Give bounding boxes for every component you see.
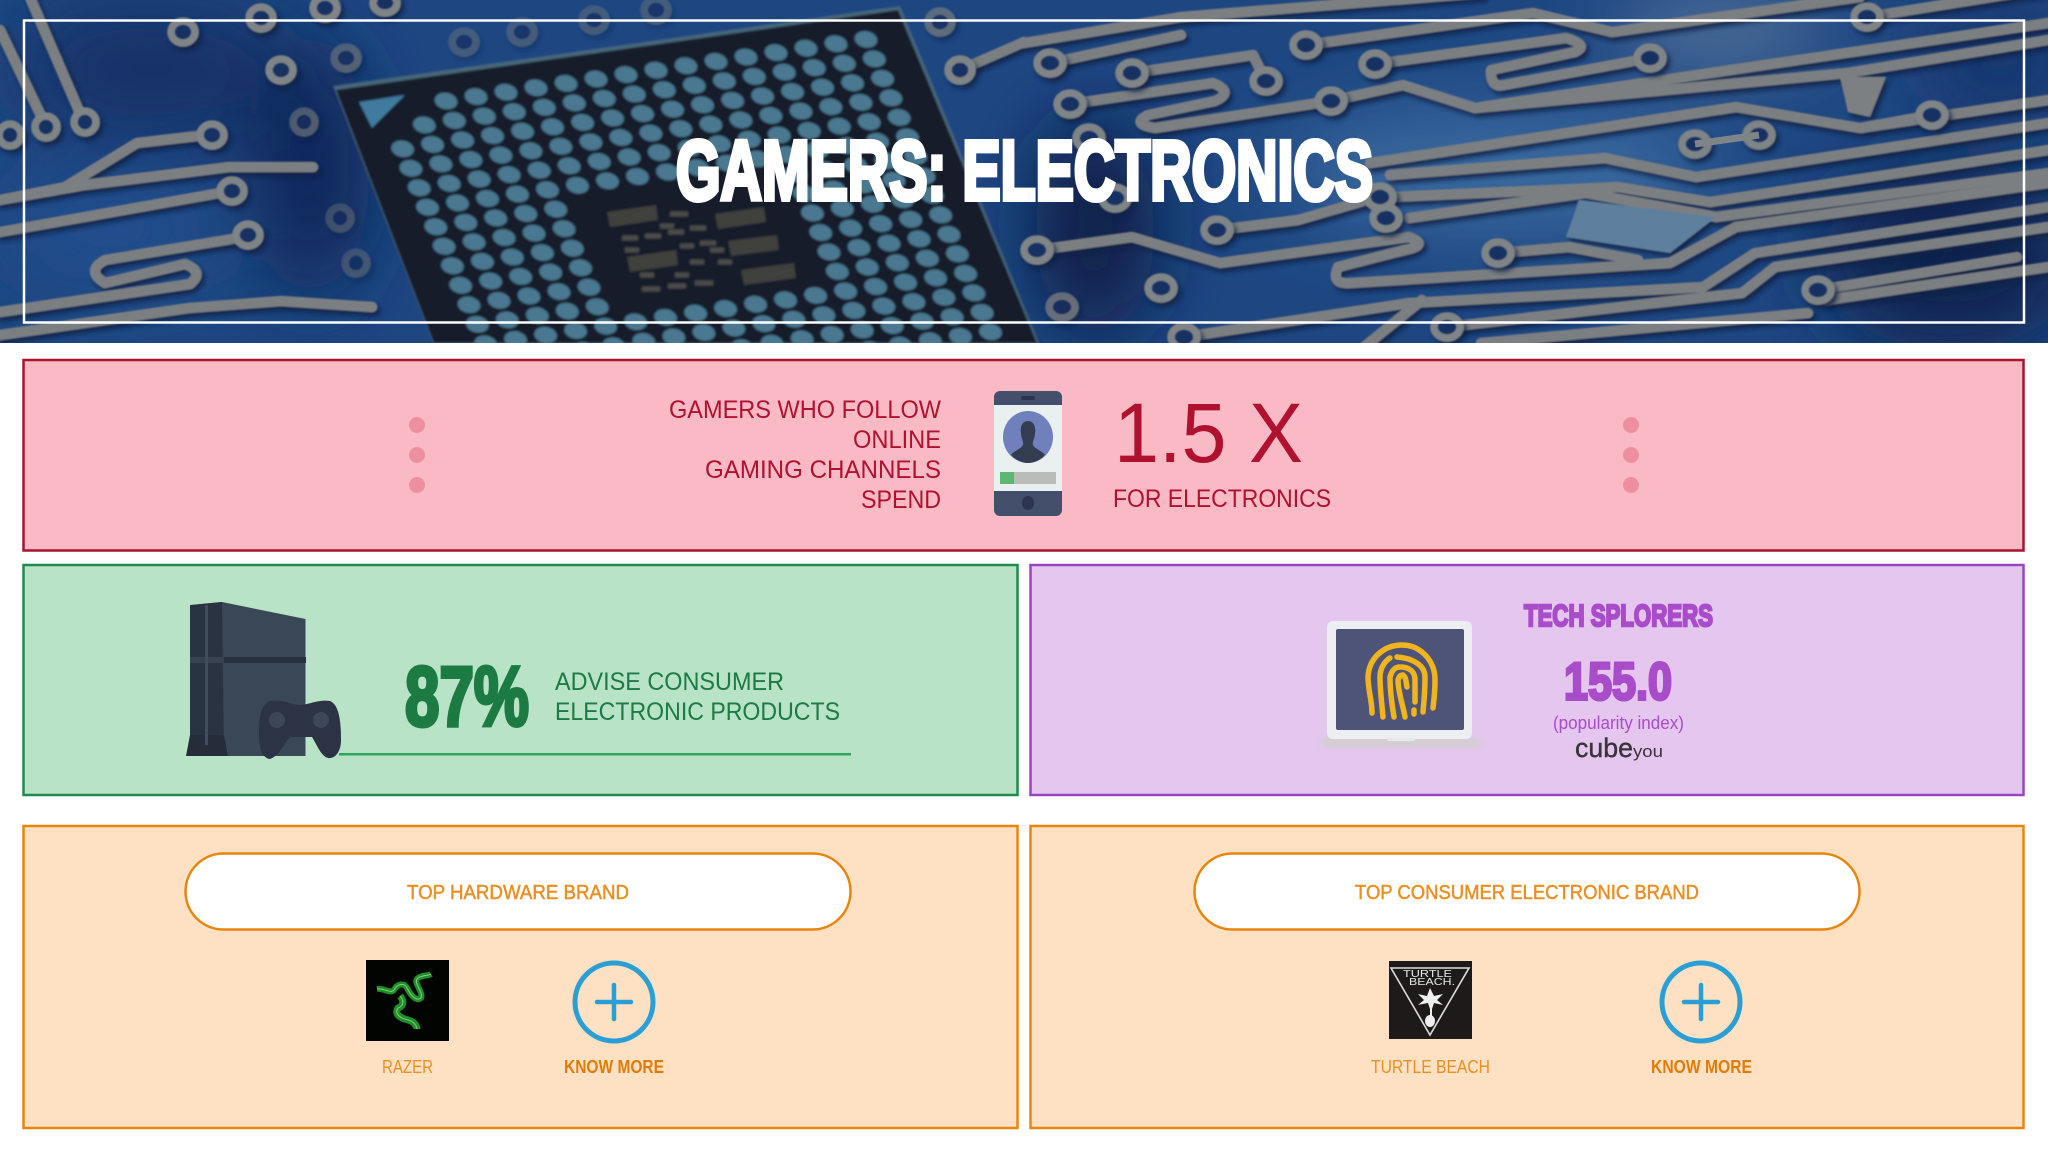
chip contact balls [390,29,1004,343]
logo: turtle beach: TURTLE [1403,969,1452,980]
icon: smartphone [994,391,1062,516]
description text: GAMING CHANNELS [705,456,941,484]
processor chip [332,6,1040,343]
icon: plus button [1662,963,1740,1041]
right dots [1623,417,1639,493]
multiplier: 1.5 X [1114,386,1303,480]
panel: online gaming channels spend [24,360,2024,550]
panel: tech splorers [1030,565,2024,795]
know more link: KNOW MORE [1651,1057,1752,1077]
panel: top consumer electronic brand [1030,826,2024,1128]
hero frame [24,20,2024,322]
chip die components [607,205,796,289]
logo: cubeyou: you [1633,742,1663,761]
logo: turtle beach: BEACH. [1409,977,1455,988]
pill heading [1194,854,1860,930]
icon: laptop with fingerprint [1322,621,1480,748]
pill heading: TOP CONSUMER ELECTRONIC BRAND [1355,882,1699,904]
icon: plus button [575,963,653,1041]
logo: turtle beach [1389,961,1472,1039]
hero banner: circuit board photo [0,0,2048,434]
multiplier caption: FOR ELECTRONICS [1113,485,1331,513]
know more link: KNOW MORE [564,1057,664,1077]
brand name: RAZER [382,1057,433,1077]
stat description: ELECTRONIC PRODUCTS [555,698,840,726]
popularity caption: (popularity index) [1553,713,1684,733]
description text [669,396,941,514]
title: GAMERS: ELECTRONICS [676,124,1373,218]
stat description: ADVISE CONSUMER [555,668,784,696]
segment name: TECH SPLORERS [1524,598,1713,633]
logo: cubeyou: cube [1575,733,1633,763]
popularity value: 155.0 [1564,652,1672,712]
brand name: TURTLE BEACH [1371,1057,1490,1077]
baseline rule [339,753,851,756]
logo: cubeyou [1575,733,1663,763]
icon: game console and controller [186,602,341,759]
left dots [409,417,425,493]
panel: advise consumer electronic products [24,565,1018,795]
stat description [555,668,840,726]
logo: razer [366,960,449,1041]
description text: ONLINE [853,426,941,454]
description text: SPEND [861,486,941,514]
pill heading: TOP HARDWARE BRAND [407,882,629,904]
stat: 87%: 87% [405,650,529,744]
circuit pads [0,0,1945,348]
pill heading [186,854,850,930]
description text: GAMERS WHO FOLLOW [669,396,941,424]
panel: top hardware brand [24,826,1018,1128]
circuit traces [0,0,2048,347]
